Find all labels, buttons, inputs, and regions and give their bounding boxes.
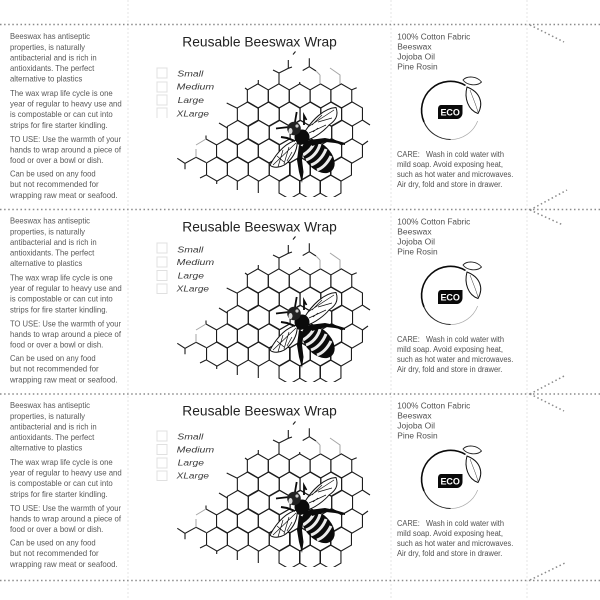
icon: bee 1 [270,108,345,183]
size checklist 3: Medium [177,444,214,454]
size checklist 3: XLarge [176,471,209,481]
care text 1 [397,150,513,189]
title 2: Reusable Beeswax Wrap [182,220,337,234]
panel: label 2 [9,216,513,384]
icon: eco badge 2 [422,262,482,325]
honeycomb 2 [177,236,370,384]
honeycomb 3 [177,422,370,569]
size checklist 2: Small [177,244,205,254]
care text 2 [397,335,513,374]
size checklist 2 [157,243,214,294]
text block: product notes 2 [9,216,122,384]
size checklist 3: Large [178,457,204,467]
icon: eco badge 3 [422,446,482,509]
honeycomb 1 [177,52,370,199]
title 3: Reusable Beeswax Wrap [182,404,337,418]
panel: label 1 [9,32,513,200]
text block: product notes 1 [9,32,122,200]
icon: bee 3 [270,478,345,553]
size checklist 1: Medium [177,82,214,92]
ingredients 3 [397,402,470,440]
care text 3 [397,519,513,558]
text block: product notes 3 [9,401,122,569]
size checklist 1: Large [178,95,204,105]
size checklist 2: Large [178,270,204,280]
icon: eco badge 1 [422,77,482,140]
size checklist 3: Small [177,431,205,441]
icon: bee 2 [270,292,345,368]
size checklist 3 [157,431,214,481]
size checklist 2: Medium [177,257,214,267]
size checklist 1: Small [177,69,205,79]
panel: label 3 [9,401,513,569]
ingredients 2 [397,218,470,256]
size checklist 1: XLarge [176,109,209,119]
size checklist 2: XLarge [176,284,209,294]
title 1: Reusable Beeswax Wrap [182,34,337,50]
size checklist 1 [157,68,214,119]
ingredients 1 [397,32,470,72]
